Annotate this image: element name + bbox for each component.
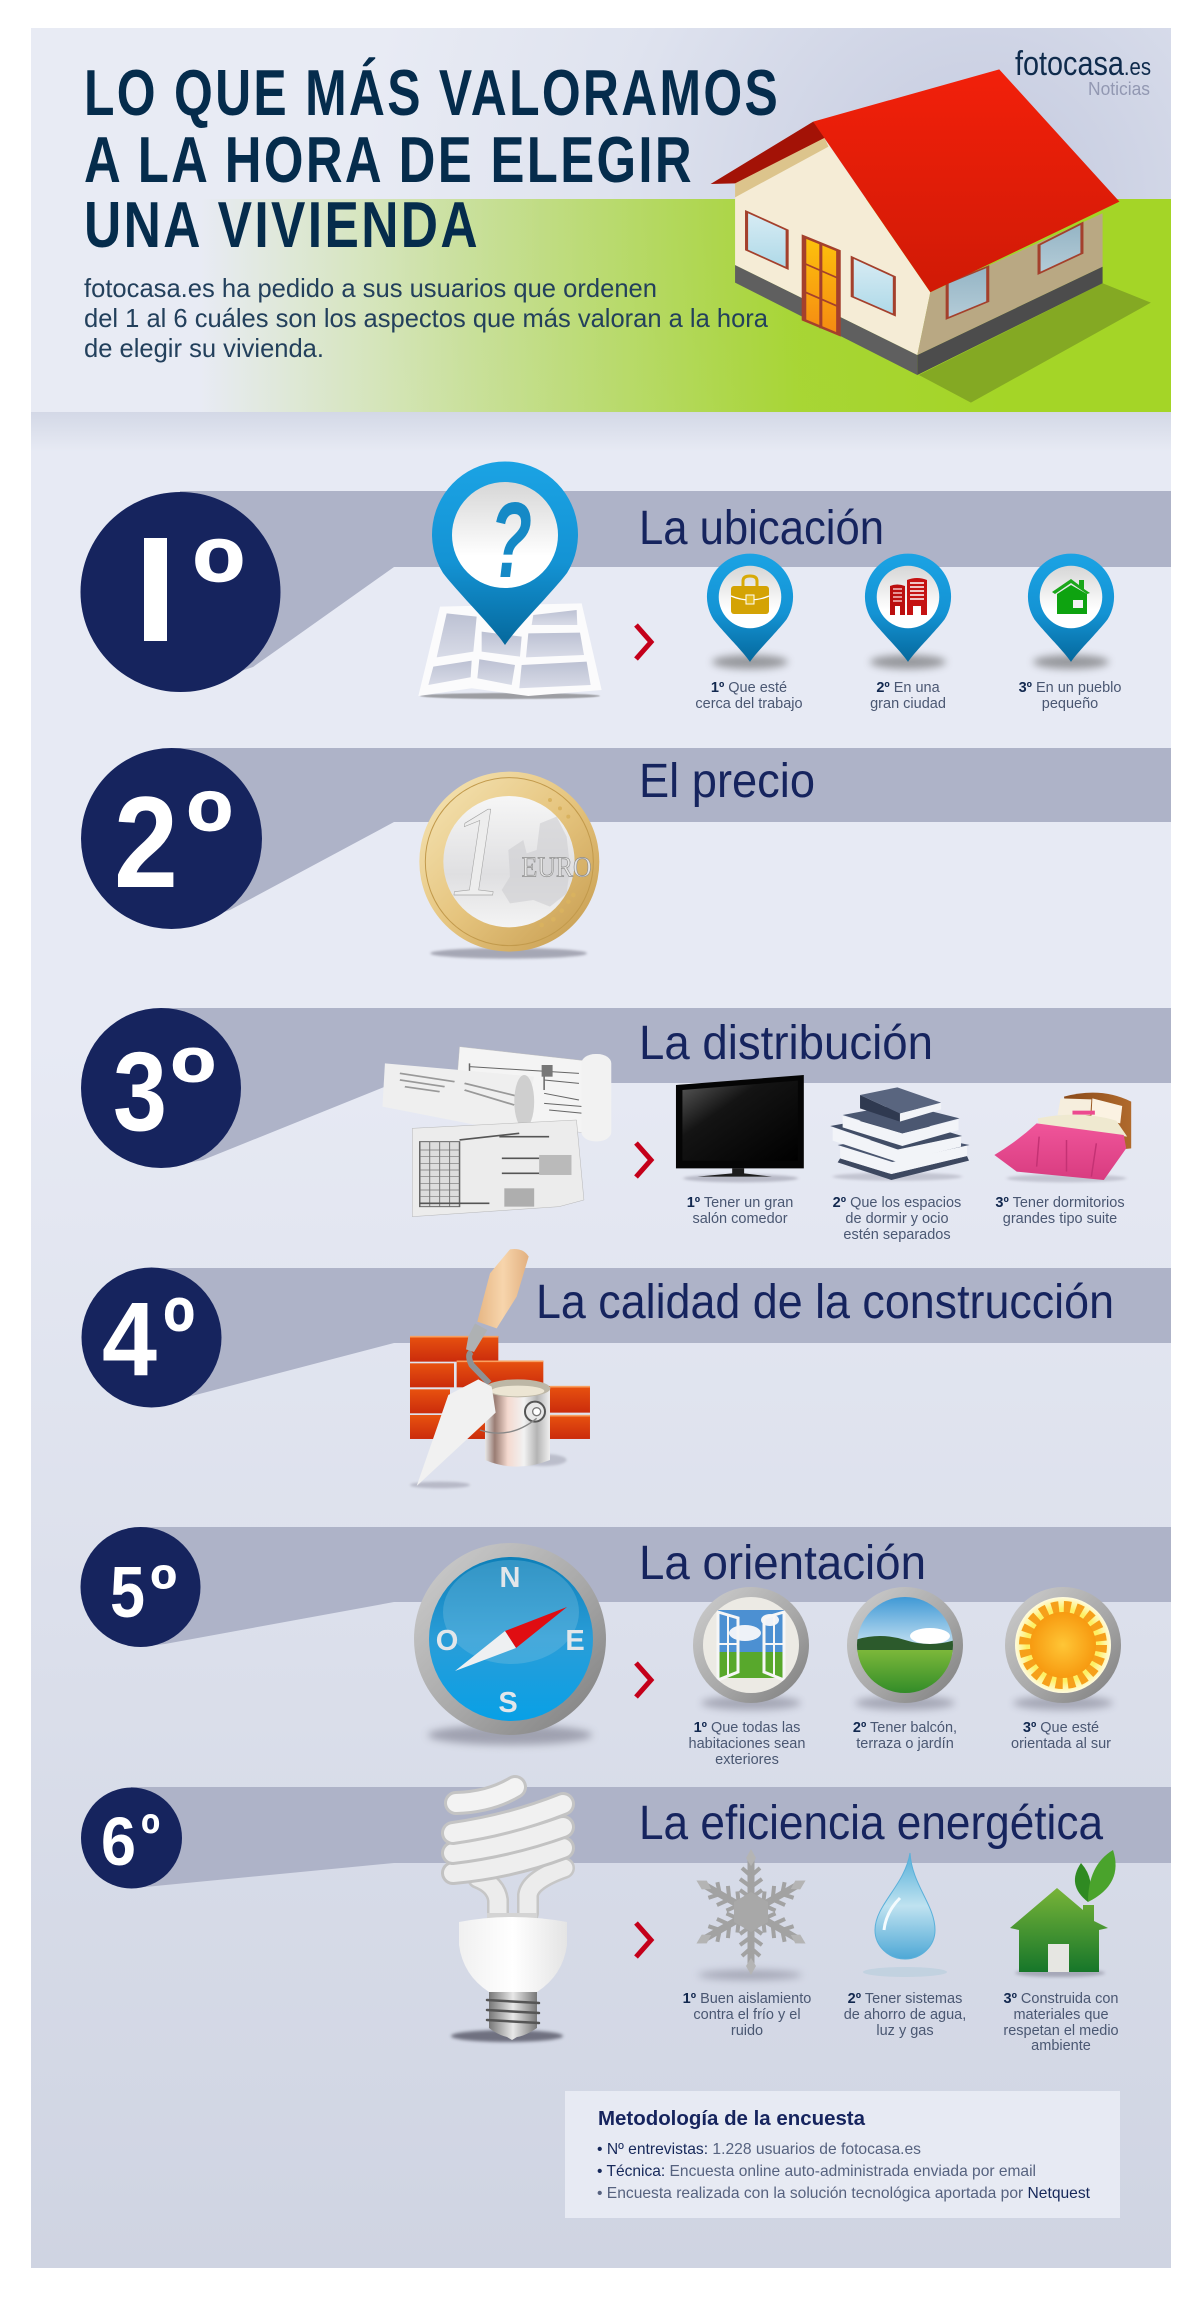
intro text: del 1 al 6 cuáles son los aspectos que más valoran a la hora [84, 303, 769, 333]
option: ahorro de agua: de ahorro de agua, [844, 2007, 966, 2023]
icon: blueprints [382, 1047, 611, 1217]
option: dormitorios tipo suite: grandes tipo suite [1003, 1211, 1117, 1227]
option: aislamiento: contra el frío y el [693, 2007, 801, 2023]
icon: compass: O [436, 1625, 458, 1657]
option: orientada al sur: orientada al sur [1011, 1736, 1111, 1752]
logo: fotocasa.es Noticias [1015, 45, 1151, 99]
option: cerca del trabajo: cerca del trabajo [695, 696, 803, 712]
band 2 [171, 748, 1171, 929]
heading: La calidad de la construcción [536, 1276, 1114, 1329]
methodology title: Metodología de la encuesta [598, 2108, 866, 2130]
rank badge 3: 3 [113, 1029, 167, 1154]
option: ahorro de agua: 2º Tener sistemas [848, 1991, 962, 2007]
logo: fotocasa.es Noticias: Noticias [1088, 79, 1150, 99]
rank badge 4: º [163, 1277, 195, 1389]
option: balcón, terraza o jardín [847, 1587, 963, 1752]
rank badge 6 [81, 1788, 182, 1888]
panel: rank 3 La distribución [81, 1008, 1171, 1243]
option: dormitorios tipo suite [994, 1093, 1131, 1227]
arrow [636, 1923, 651, 1957]
rank badge 6: º [141, 1803, 160, 1867]
icon: map with question pin [418, 461, 602, 699]
band 6 [131, 1787, 1171, 1888]
rank badge 6: 6 [101, 1803, 136, 1880]
option: espacios separados: estén separados [843, 1227, 951, 1243]
icon: compass [414, 1543, 606, 1745]
option: pueblo pequeño [1019, 554, 1121, 712]
option: habitaciones exteriores [689, 1587, 809, 1768]
option: gran ciudad [865, 554, 951, 712]
title [84, 56, 780, 261]
logo: fotocasa.es Noticias: fotocasa.es [1015, 45, 1151, 83]
intro text: fotocasa.es ha pedido a sus usuarios que ordenen [84, 273, 657, 303]
rank badge 3 [81, 1008, 241, 1168]
heading: El precio [639, 755, 815, 808]
rank badge 5: 5 [110, 1553, 145, 1633]
option: balcón, terraza o jardín: terraza o jardín [856, 1736, 954, 1752]
rank badge 5: º [150, 1551, 177, 1630]
panel: rank 2 El precio [81, 748, 1171, 959]
option: gran ciudad: 2º En una [876, 680, 941, 696]
arrow [636, 625, 651, 659]
option: dormitorios tipo suite: 3º Tener dormitorios [995, 1195, 1125, 1211]
option: cerca del trabajo: 1º Que esté [711, 680, 787, 696]
title: UNA VIVIENDA [84, 188, 480, 261]
rank badge 3: º [170, 1026, 216, 1141]
icon: compass: S [498, 1687, 518, 1719]
band 1 [180, 491, 1171, 692]
option: espacios separados: 2º Que los espacios [833, 1195, 961, 1211]
heading: La distribución [639, 1017, 933, 1070]
band 4 [151, 1268, 1171, 1407]
option: materiales medio ambiente: ambiente [1031, 2038, 1091, 2054]
option: habitaciones exteriores: habitaciones sean [689, 1736, 805, 1752]
icon: trowel, bricks and paint can [410, 1249, 590, 1488]
panel: rank 6 La eficiencia energética [81, 1787, 1171, 2054]
option: orientada al sur [1005, 1587, 1121, 1752]
intro text [84, 273, 769, 363]
arrow [636, 1663, 651, 1697]
methodology list [597, 2141, 1091, 2202]
option: salón comedor: salón comedor [692, 1211, 788, 1227]
pin [432, 461, 578, 645]
panel: rank 1 La ubicación [80, 461, 1171, 712]
option: pueblo pequeño: pequeño [1042, 696, 1098, 712]
option: ahorro de agua: luz y gas [876, 2023, 934, 2039]
option: espacios separados [830, 1087, 969, 1243]
option: orientada al sur: 3º Que esté [1023, 1720, 1099, 1736]
option: espacios separados: de dormir y ocio [845, 1211, 949, 1227]
question mark: ? [490, 479, 532, 600]
arrow [636, 1143, 651, 1177]
option: materiales medio ambiente: 3º Construida con [1004, 1991, 1118, 2007]
option: habitaciones exteriores: exteriores [715, 1752, 779, 1768]
methodology list: • Encuesta realizada con la solución tecnológica aportada por Netquest [597, 2185, 1091, 2202]
methodology list: • Nº entrevistas: 1.228 usuarios de fotocasa.es [597, 2141, 921, 2158]
option: materiales medio ambiente [1003, 1850, 1119, 2054]
rank badge 5 [80, 1527, 200, 1647]
methodology list: • Técnica: Encuesta online auto-administrada enviada por email [597, 2163, 1036, 2180]
heading: La orientación [639, 1537, 926, 1590]
option: salón comedor: 1º Tener un gran [687, 1195, 793, 1211]
rank badge 2 [81, 748, 262, 929]
intro text: de elegir su vivienda. [84, 333, 324, 363]
map [418, 603, 602, 699]
band 5 [140, 1527, 1171, 1647]
band 3 [161, 1008, 1171, 1168]
option: materiales medio ambiente: respetan el medio [1003, 2023, 1119, 2039]
option: gran ciudad: gran ciudad [870, 696, 946, 712]
rank badge 1: 1 [103, 511, 191, 672]
rank badge 2: 2 [114, 769, 178, 915]
rank badge 4 [82, 1268, 222, 1408]
option: ahorro de agua [844, 1853, 966, 2039]
hero background [31, 28, 1171, 412]
icon: compass: E [565, 1625, 585, 1657]
option: aislamiento: ruido [731, 2023, 763, 2039]
icon: house [711, 69, 1151, 403]
rank badge 1: º [192, 512, 245, 656]
panel: rank 5 La orientación [80, 1527, 1171, 1768]
rank badge 4: 4 [102, 1281, 157, 1398]
panel: survey methodology [565, 2091, 1120, 2218]
rank badge 1 [80, 492, 280, 692]
rank badge 2: º [186, 766, 233, 900]
option: balcón, terraza o jardín: 2º Tener balcón, [853, 1720, 957, 1736]
option: habitaciones exteriores: 1º Que todas las [694, 1720, 800, 1736]
option: cerca del trabajo [695, 554, 803, 712]
title: A LA HORA DE ELEGIR [84, 123, 694, 196]
icon: euro coin: 1 [450, 780, 505, 924]
icon: energy saving bulb [451, 1787, 567, 2042]
option: salón comedor [676, 1075, 804, 1227]
icon: compass: N [500, 1562, 520, 1594]
option: aislamiento: 1º Buen aislamiento [683, 1991, 811, 2007]
panel: rank 4 La calidad de la construcción [82, 1249, 1171, 1488]
option: materiales medio ambiente: materiales que [1013, 2007, 1109, 2023]
icon: euro coin [419, 772, 599, 959]
option: aislamiento [683, 1849, 811, 2039]
title: LO QUE MÁS VALORAMOS [84, 56, 780, 129]
panel: hero header [31, 28, 1171, 412]
option: pueblo pequeño: 3º En un pueblo [1019, 680, 1121, 696]
icon: euro coin: EURO [522, 853, 592, 884]
heading: La ubicación [639, 502, 884, 555]
heading: La eficiencia energética [639, 1797, 1103, 1850]
